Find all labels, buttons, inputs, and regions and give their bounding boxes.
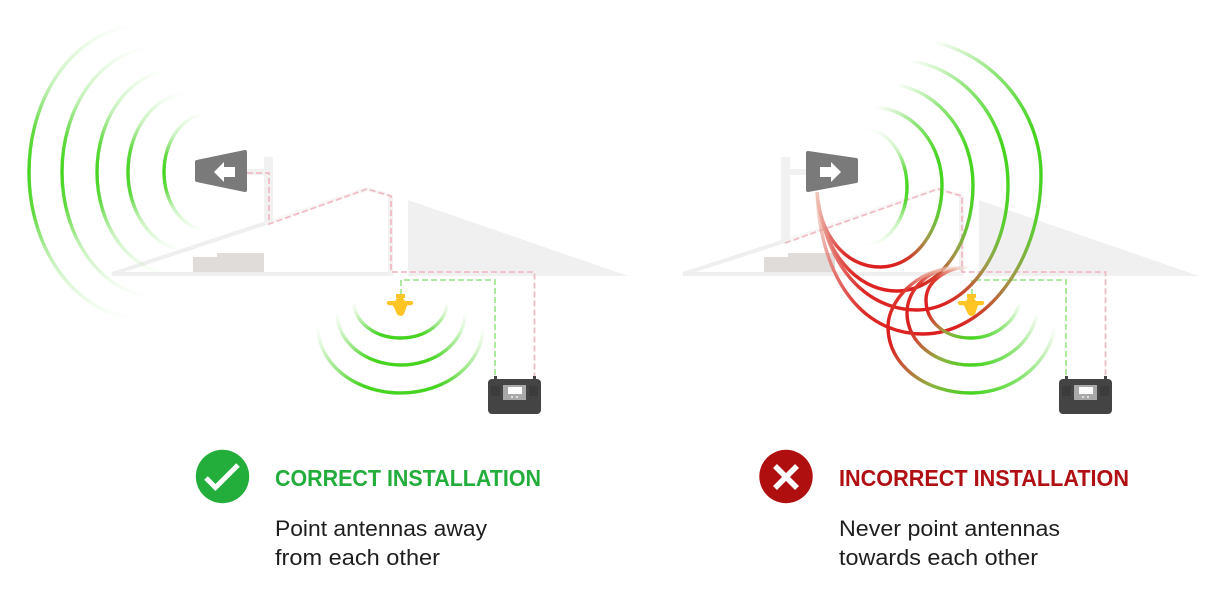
panel: correct installation [29,25,628,570]
furniture [764,253,835,272]
icon: outdoor antenna [197,152,245,190]
icon: signal booster [488,376,541,414]
heading: incorrect installation: INCORRECT INSTALLATION [839,465,1129,491]
text: never point antennas: Never point antennas [839,516,1060,541]
icon: signal booster [1059,376,1112,414]
outdoor signal waves [29,25,210,319]
cable: outdoor antenna to booster [785,189,1106,378]
icon: outdoor antenna [808,153,856,190]
indoor signal waves [888,267,1055,393]
cable: indoor antenna to booster [972,280,1066,378]
house outline [683,157,1199,276]
panel: incorrect installation [683,42,1199,570]
icon: cross mark [759,450,813,503]
house outline [112,157,628,276]
text: point antennas away: from each other [275,545,440,570]
cable: outdoor antenna to booster [247,173,534,378]
icon: check mark [196,450,249,503]
cable: indoor antenna to booster [401,280,495,378]
heading: correct installation: CORRECT INSTALLATION [275,465,541,491]
outdoor signal waves [817,42,1041,334]
furniture [193,253,264,272]
text: point antennas away: Point antennas away [275,516,487,541]
icon: indoor antenna [387,294,413,316]
icon: indoor antenna [958,294,984,316]
indoor signal waves [318,302,483,393]
text: never point antennas: towards each other [839,545,1038,570]
